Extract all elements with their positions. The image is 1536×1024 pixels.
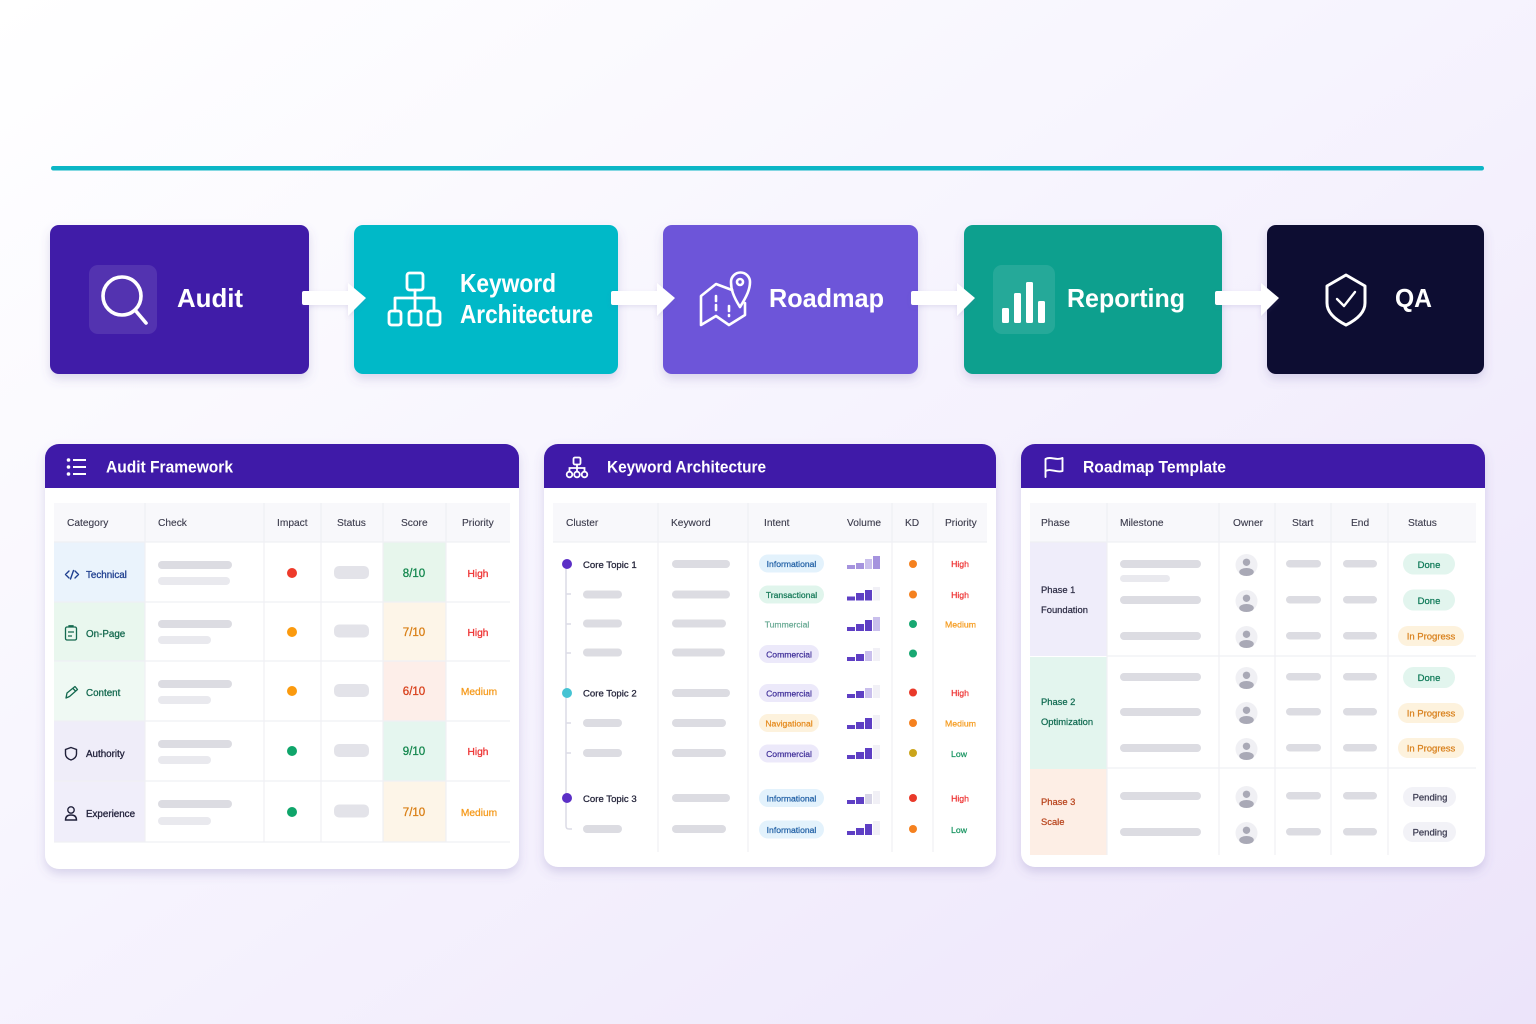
end dates (1343, 560, 1377, 836)
status pills: Done (1418, 560, 1440, 571)
row: Core Topic 1: Core Topic 1 (583, 560, 637, 571)
row: Core Topic 1 item 2 (583, 586, 969, 604)
row: On-Page: 7/10 (403, 627, 425, 639)
status pills (1398, 554, 1464, 842)
heading: Keyword Architecture (607, 458, 766, 476)
step: Keyword Architecture (354, 225, 618, 374)
table header: Keyword (671, 518, 711, 529)
table header: Start (1292, 518, 1314, 529)
start dates (1286, 560, 1321, 836)
heading: Audit Framework (106, 458, 234, 476)
row: Technical: Technical (86, 570, 127, 581)
row: Core Topic 1 item 3 (583, 617, 976, 631)
icon: shield check (1327, 275, 1365, 325)
row: Core Topic 3: High (951, 794, 969, 804)
row: Core Topic 1 item 3: Medium (945, 620, 976, 630)
row: Core Topic 2 item 2: Medium (945, 718, 976, 728)
heading: Roadmap Template (1083, 458, 1226, 476)
table header: KD (905, 518, 919, 529)
row: Core Topic 2 item 2 (583, 714, 976, 732)
row: Core Topic 3 (583, 789, 969, 807)
table header: Milestone (1120, 518, 1164, 529)
row: Core Topic 3 item 2: Low (951, 825, 968, 835)
row: Core Topic 1: High (951, 559, 969, 569)
table header: Category (67, 518, 109, 529)
row: Core Topic 1: Informational (767, 559, 816, 569)
icon: page (66, 626, 76, 640)
icon: code (66, 570, 78, 579)
row: Core Topic 3: Core Topic 3 (583, 794, 637, 805)
row: Core Topic 1 item 4 (583, 645, 917, 663)
row: Core Topic 2 item 2: Navigational (765, 718, 813, 728)
phase 1 cell (1030, 542, 1107, 656)
table header: Cluster (566, 518, 599, 529)
step: Audit: Audit (177, 283, 243, 313)
row: Core Topic 2 (583, 684, 969, 702)
table header: Check (158, 518, 188, 529)
icon: map with pin (701, 272, 750, 325)
row: Experience: Medium (461, 808, 497, 819)
row: Technical: 8/10 (403, 568, 425, 580)
icon: list (67, 458, 86, 476)
arrow: Reporting to QA (1215, 283, 1279, 316)
row: Core Topic 3 item 2: Informational (767, 825, 816, 835)
step: Reporting (964, 225, 1222, 374)
panel: Audit Framework (45, 444, 519, 869)
row: On-Page: High (468, 628, 488, 639)
row: Core Topic 2 item 3: Low (951, 749, 968, 759)
icon: shield (66, 748, 76, 760)
step: QA (1267, 225, 1484, 374)
phase 3 cell (1030, 769, 1107, 855)
icon: sitemap small (567, 458, 587, 477)
row: Core Topic 1 item 2: High (951, 590, 969, 600)
owner avatars (1236, 554, 1258, 844)
row: On-Page: On-Page (86, 629, 126, 640)
step: Roadmap: Roadmap (769, 283, 884, 313)
row: Core Topic 2: High (951, 688, 969, 698)
phase 1 cell: Foundation (1041, 604, 1088, 615)
row: Content: Medium (461, 687, 497, 698)
table header: Status (1408, 518, 1437, 529)
step: Reporting: Reporting (1067, 283, 1185, 313)
row: Experience (66, 800, 497, 825)
row: Core Topic 3: Informational (767, 794, 816, 804)
row: Core Topic 1 item 2: Transactional (766, 590, 817, 600)
row: Core Topic 2: Core Topic 2 (583, 688, 637, 700)
step: QA: QA (1395, 283, 1432, 313)
table header: Intent (764, 518, 790, 529)
panel: Keyword Architecture (544, 444, 996, 867)
phase 1 cell: Phase 1 (1041, 584, 1075, 595)
icon: flag (1046, 458, 1062, 477)
row: Content (66, 680, 497, 704)
row: Experience: 7/10 (403, 807, 425, 819)
phase 3 cell: Scale (1041, 816, 1064, 827)
row: Authority: High (468, 747, 488, 758)
row: Core Topic 2: Commercial (766, 688, 812, 698)
row: Core Topic 1 item 3: Tummercial (765, 620, 809, 630)
status pills: In Progress (1407, 744, 1456, 754)
table header: End (1351, 518, 1369, 529)
arrow: Audit to Keyword Architecture (302, 283, 366, 316)
row: Content: 6/10 (403, 686, 425, 698)
row: Authority: Authority (86, 749, 125, 760)
status pills: In Progress (1407, 708, 1456, 720)
teal divider rule (51, 166, 1484, 170)
icon: bar chart (1002, 282, 1045, 323)
icon: pencil (66, 686, 78, 698)
row: Core Topic 1 (583, 554, 969, 572)
row: Content: Content (86, 688, 121, 699)
row: Experience: Experience (86, 809, 136, 820)
step: Keyword Architecture: Architecture (460, 299, 593, 329)
table header: Owner (1233, 518, 1264, 529)
row: Technical: High (468, 569, 488, 580)
step: Roadmap (663, 225, 918, 374)
table header: Volume (847, 518, 881, 529)
row: Core Topic 2 item 3: Commercial (766, 749, 812, 759)
status pills: Done (1418, 673, 1440, 684)
table header: Priority (945, 518, 978, 529)
table header: Score (401, 518, 428, 529)
status pills: Done (1418, 596, 1440, 607)
row: Core Topic 3 item 2 (583, 820, 968, 838)
status pills: Pending (1413, 792, 1447, 804)
arrow: Roadmap to Reporting (911, 283, 975, 316)
phase 2 cell: Optimization (1041, 716, 1093, 727)
phase 2 cell (1030, 657, 1107, 769)
status pills: In Progress (1407, 632, 1456, 642)
table header: Phase (1041, 518, 1070, 529)
table header (54, 503, 510, 542)
icon: sitemap (389, 273, 440, 325)
panel: Roadmap Template (1021, 444, 1485, 867)
row: Authority: 9/10 (403, 746, 425, 758)
row: Authority (66, 740, 488, 764)
table header: Status (337, 518, 366, 529)
step: Keyword Architecture: Keyword (460, 268, 556, 298)
row: Technical (66, 561, 488, 585)
table header (1030, 503, 1476, 542)
row: Core Topic 2 item 3 (583, 744, 968, 762)
milestone bars (1120, 560, 1201, 836)
icon: person (66, 807, 76, 820)
score column fills (383, 542, 446, 842)
arrow: Keyword Architecture to Roadmap (611, 283, 675, 316)
row: Core Topic 1 item 4: Commercial (766, 650, 812, 660)
phase 2 cell: Phase 2 (1041, 696, 1075, 707)
category column fills (54, 542, 145, 842)
step: Audit (50, 225, 309, 374)
table header: Priority (462, 518, 495, 529)
status pills: Pending (1413, 828, 1447, 838)
icon: magnifier (103, 277, 146, 323)
process flow (50, 225, 1484, 374)
phase 3 cell: Phase 3 (1041, 796, 1075, 807)
row: On-Page (66, 620, 488, 644)
table header: Impact (277, 518, 308, 529)
table header (553, 503, 987, 542)
cluster timeline (562, 559, 572, 829)
